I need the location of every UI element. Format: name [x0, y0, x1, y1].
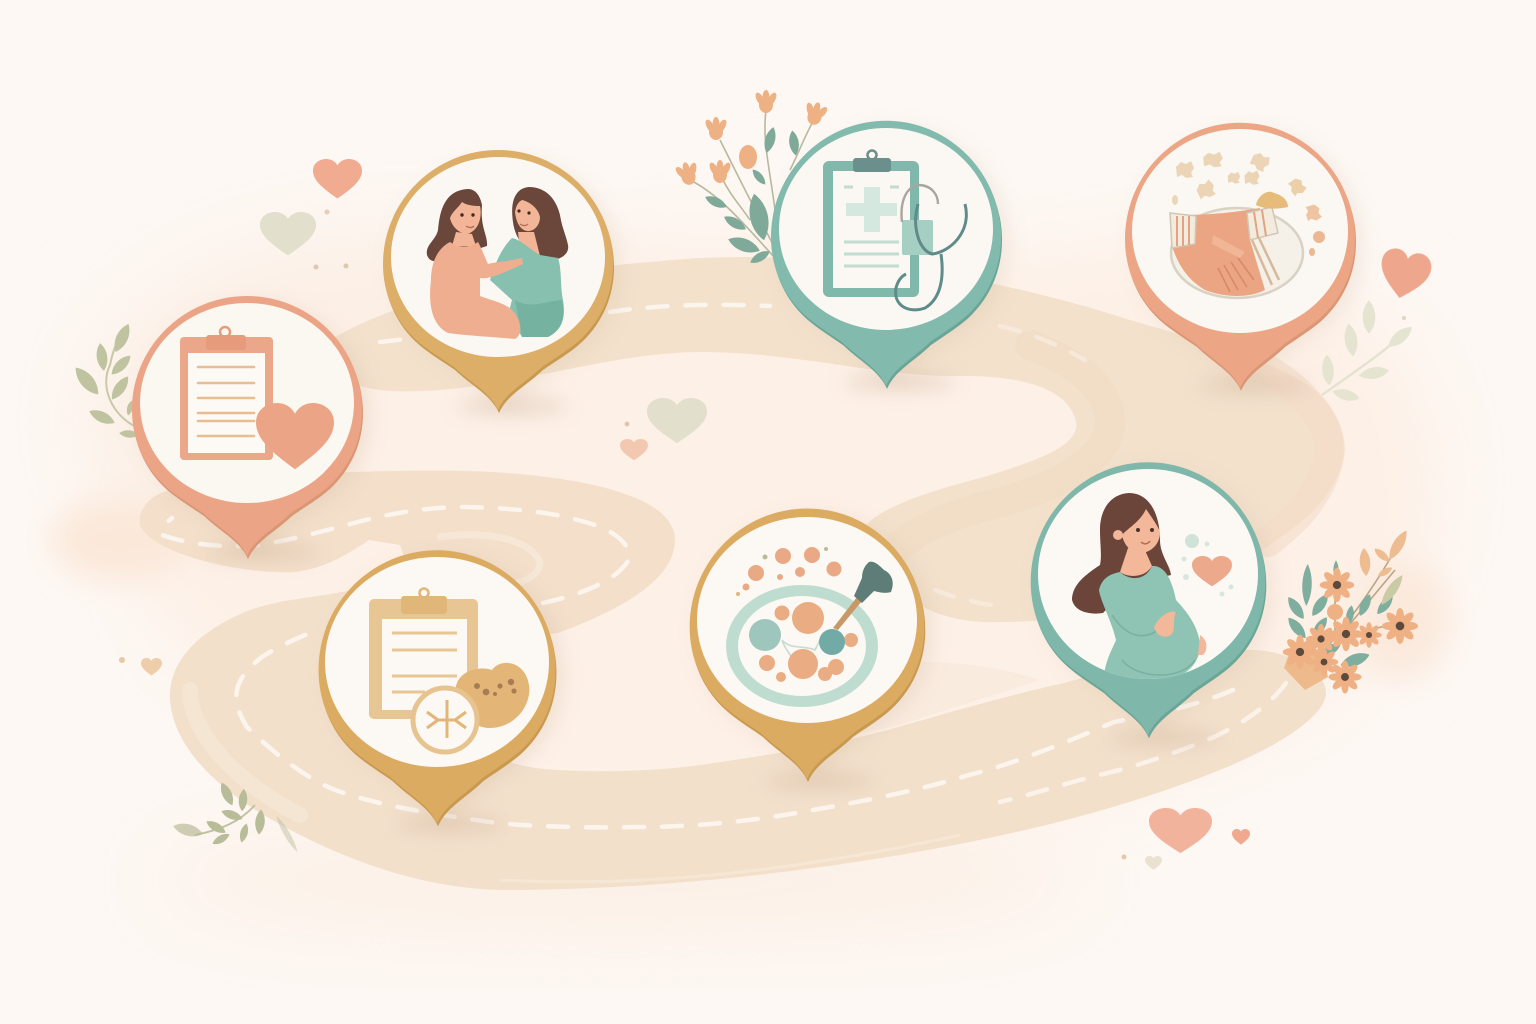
flower pot: [1284, 645, 1328, 690]
pin soft shadows: [140, 127, 1363, 831]
decorative hearts and dots: [119, 159, 1434, 870]
flowering sprig: behind teal pin: [673, 90, 830, 266]
road centre dashes: [162, 305, 1286, 827]
mother figure: [1072, 493, 1206, 682]
fruit slice icon: [413, 688, 477, 752]
right woman: [490, 187, 568, 337]
clipboard icon: [369, 588, 478, 719]
surrounding cells: [736, 547, 842, 596]
infographic canvas: [48, 90, 1455, 922]
falling leaves: [1172, 150, 1325, 256]
upper road: [324, 257, 1344, 622]
heart with dots: [1182, 534, 1234, 596]
pin 6: cells under a microscope dish: [690, 508, 925, 782]
lower road: [140, 471, 1326, 890]
left woman: [427, 189, 523, 339]
sprig: lower left: [172, 781, 300, 854]
pin 1: clipboard with heart: [132, 296, 363, 559]
petri dish icon: [726, 585, 878, 707]
pin 7: expectant mother: [1031, 462, 1266, 738]
pin 2: two women supporting each other: [383, 150, 614, 413]
heart icon: [256, 403, 334, 469]
pin 3: clipboard with stethoscope: [771, 121, 1002, 389]
pin 4: handshake with leaves: [1125, 123, 1356, 391]
pin 5: clipboard with fruit: [319, 550, 556, 826]
medical clipboard icon: [823, 150, 919, 297]
pipette icon: [833, 562, 893, 630]
stethoscope icon: [896, 185, 966, 310]
bouquet: lower right: [1283, 528, 1418, 694]
pale sprig: right of salmon pin: [1321, 300, 1416, 404]
small golden heart: [1256, 192, 1288, 209]
sprig: left of first pin: [71, 322, 139, 439]
handshake icon: [1170, 207, 1303, 298]
clipboard icon: [180, 327, 273, 460]
cookie icon: [455, 663, 529, 728]
